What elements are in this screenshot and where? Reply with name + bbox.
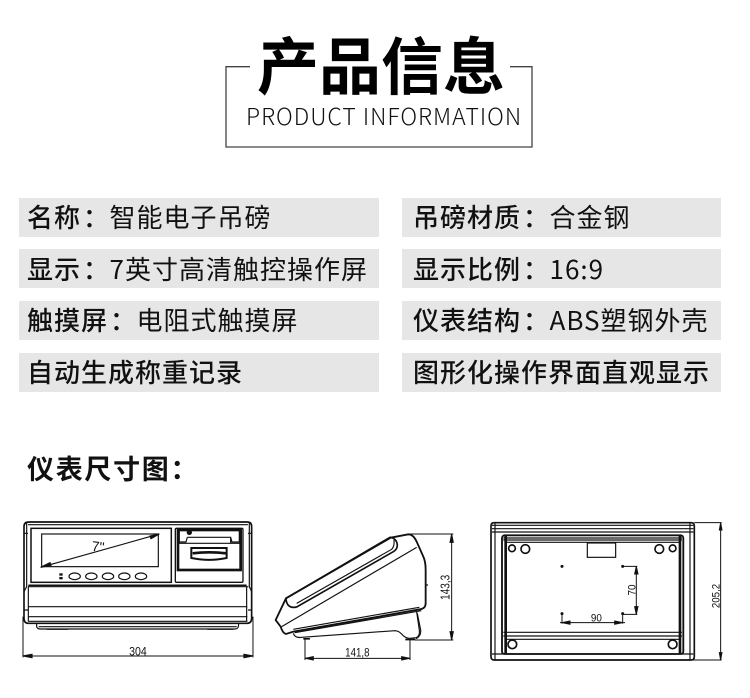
dimension: 90: 90 (591, 613, 602, 625)
dimension: 143,3: 143,3 (439, 575, 453, 600)
dimension: 304: 304 (129, 644, 147, 658)
spec: graphical interface: 图形化操作界面直观显示 (413, 353, 710, 390)
feet (37, 624, 239, 629)
label: 7 inch screen: 7" (91, 538, 105, 555)
screw points (560, 565, 624, 615)
dimension: 90 (560, 613, 625, 625)
spec: auto weighing records: 自动生成称重记录 (27, 353, 243, 390)
dimension: 304 (23, 617, 253, 658)
spec: aspect ratio (402, 249, 721, 288)
dimension: 143,3 (408, 534, 453, 640)
title: 产品信息: 产品信息 (257, 17, 505, 107)
spec: auto weighing records (19, 353, 379, 392)
drawing: back view (491, 523, 722, 660)
printer (175, 528, 243, 582)
heading: dimension drawing: 仪表尺寸图： (27, 448, 199, 487)
mounting holes (508, 545, 677, 649)
keypad buttons (69, 573, 147, 580)
dimension: 70: 70 (626, 584, 638, 595)
subtitle: PRODUCT INFORMATION: PRODUCT INFORMATION (246, 98, 522, 132)
spec: hook material (402, 198, 721, 237)
dimension: 205,2: 205,2 (710, 584, 722, 608)
label plate (587, 543, 616, 557)
indicator dots (59, 573, 63, 579)
spec: name: 名称：智能电子吊磅 (27, 198, 272, 235)
dimension: 205,2 (495, 523, 722, 660)
drawing: front view (23, 522, 253, 658)
spec: touch screen: 触摸屏：电阻式触摸屏 (27, 301, 299, 338)
spec: display: 显示：7英寸高清触控操作屏 (27, 250, 368, 287)
spec: structure: 仪表结构：ABS塑钢外壳 (413, 301, 709, 338)
drawing: side view (276, 534, 453, 660)
dimension: 70 (623, 566, 638, 614)
dimension: 141,8 (305, 638, 410, 660)
dimension: 141,8: 141,8 (345, 647, 369, 660)
spec: name (19, 198, 379, 237)
spec: hook material: 吊磅材质：合金钢 (413, 198, 631, 235)
spec: aspect ratio: 显示比例：16:9 (413, 250, 604, 287)
